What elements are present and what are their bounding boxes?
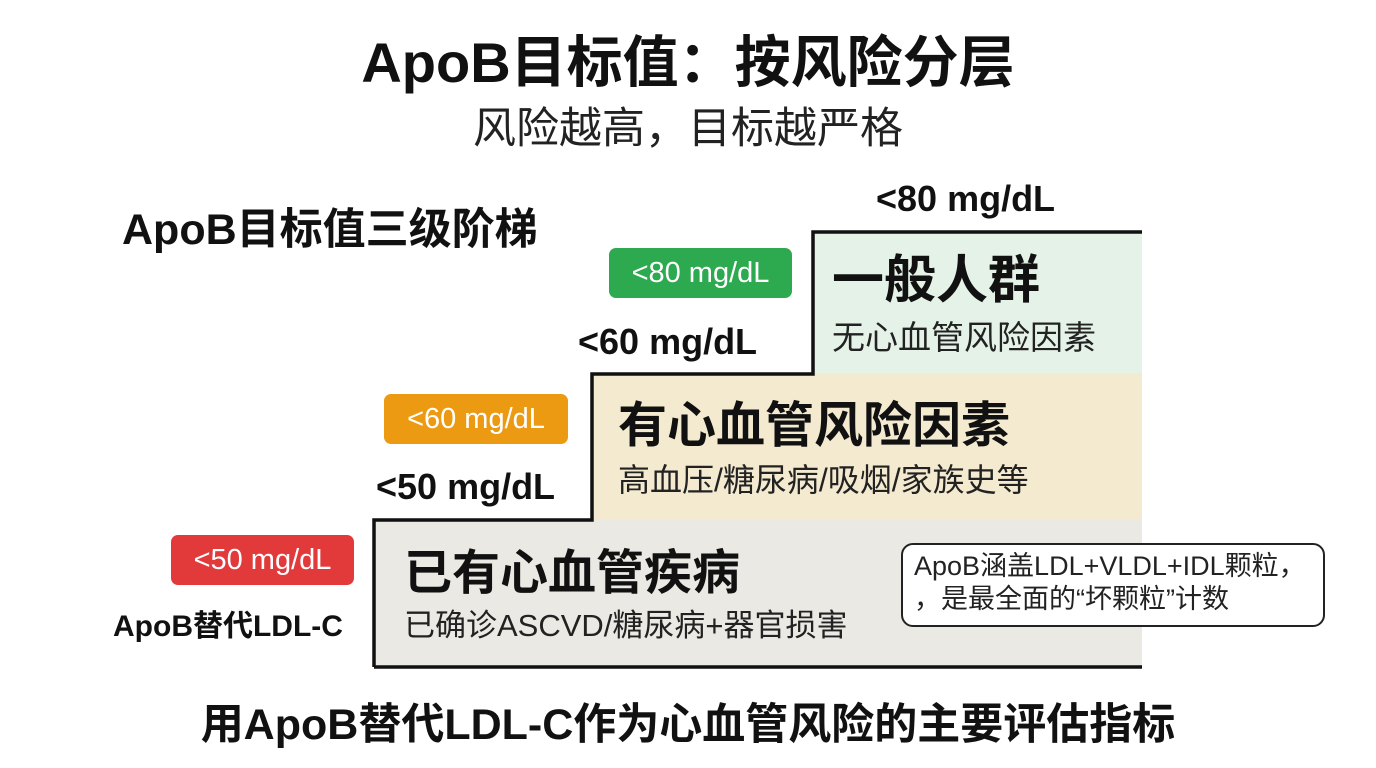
footer: 用ApoB替代LDL-C作为心血管风险的主要评估指标	[201, 701, 1175, 749]
threshold labels: <80 mg/dL	[876, 178, 1055, 219]
staircase chart	[372, 230, 1142, 669]
step label: general population	[832, 252, 1096, 356]
step label: risk factors: 有心血管风险因素	[618, 399, 1010, 453]
step label: general population: 一般人群	[832, 252, 1040, 310]
pill: green: <80 mg/dL	[632, 257, 769, 289]
pill: green	[609, 248, 792, 298]
pill: red	[171, 535, 354, 585]
step label: existing disease: 已确诊ASCVD/糖尿病+器官损害	[404, 608, 848, 643]
text: <50 mg/dL	[376, 466, 555, 507]
pill: orange	[384, 394, 568, 444]
callout	[901, 543, 1325, 627]
pill: orange: <60 mg/dL	[407, 403, 545, 435]
subtitle: 风险越高，目标越严格	[473, 105, 903, 153]
step label: risk factors: 高血压/糖尿病/吸烟/家族史等	[618, 462, 1029, 498]
callout: ApoB涵盖LDL+VLDL+IDL颗粒，	[914, 551, 1306, 581]
step label: existing disease: 已有心血管疾病	[404, 547, 740, 600]
section heading: ApoB目标值三级阶梯	[122, 206, 538, 254]
step label: general population: 无心血管风险因素	[832, 319, 1096, 356]
title: ApoB目标值：按风险分层	[361, 31, 1015, 94]
side note: ApoB替代LDL-C	[113, 610, 343, 643]
step label: risk factors	[618, 399, 1029, 498]
callout: ，是最全面的“坏颗粒”计数	[914, 584, 1229, 614]
pill: red: <50 mg/dL	[194, 544, 331, 576]
text: <60 mg/dL	[578, 321, 757, 362]
step label: existing disease	[404, 547, 848, 643]
